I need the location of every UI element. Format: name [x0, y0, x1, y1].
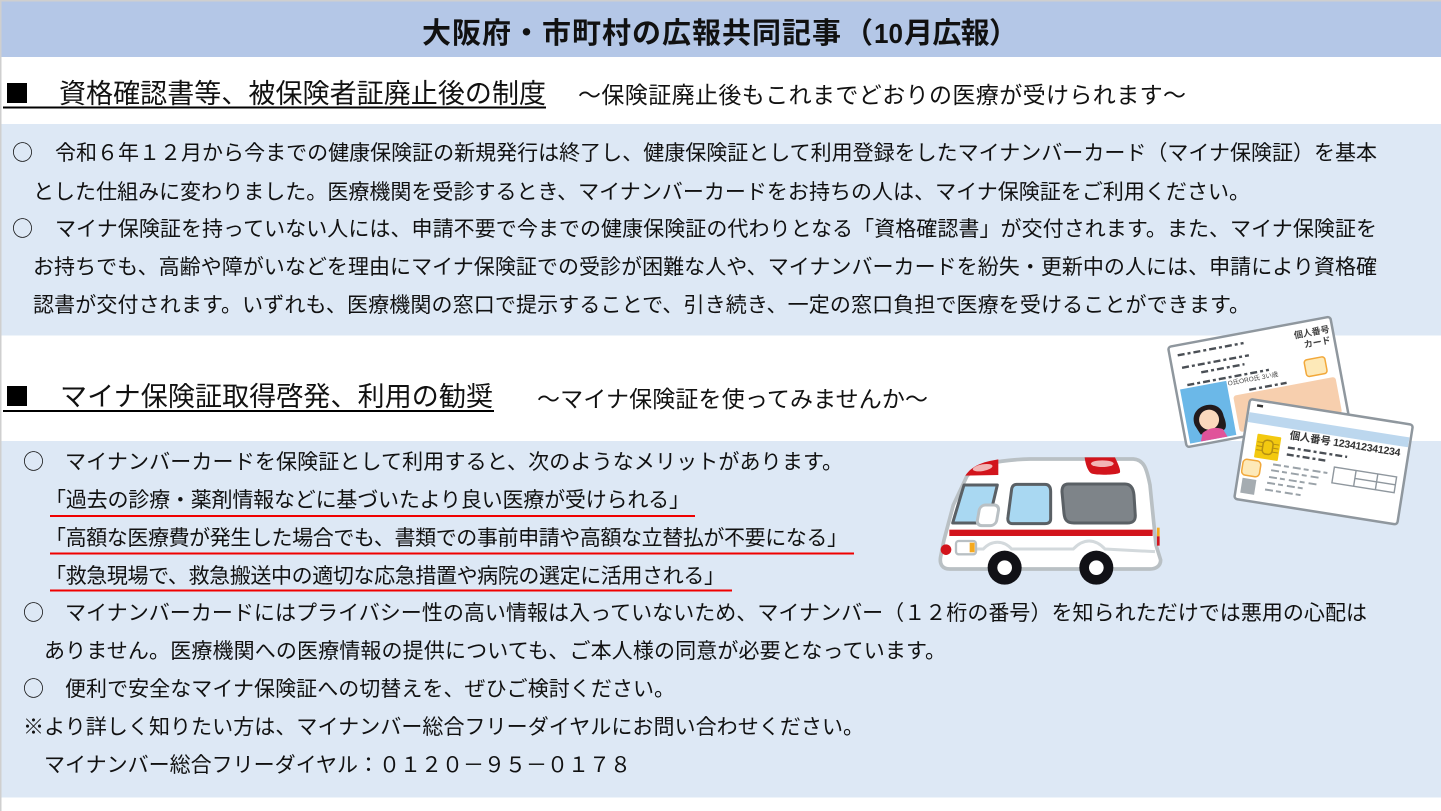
- icon: my number card front: [1168, 317, 1349, 447]
- icon: my number card front: O氏ORO氏 3い歳: [1227, 369, 1279, 388]
- icon: my number card back: 個人番号 123412341234: [1289, 429, 1402, 459]
- text: bullet 2: お持ちでも、高齢や障がいなどを理由にマイナ保険証での受診が困難な人や、マイナンバーカードを紛失・更新中の人には、申請により資格確: [33, 256, 1377, 279]
- text: bullet 1: [12, 137, 1377, 204]
- text: bullet 2: ○: [12, 213, 33, 243]
- title banner: 月広報）: [904, 17, 1018, 50]
- title banner: [2, 2, 1441, 57]
- text: free dial number: マイナンバー総合フリーダイヤル：０１２０－９５－０１７８: [44, 754, 631, 777]
- text: privacy bullet: ありません。医療機関への医療情報の提供についても、ご本人様の同意が必要となっています。: [44, 640, 946, 663]
- text: bullet 1: 令和６年１２月から今までの健康保険証の新規発行は終了し、健康保険証として利用登録をしたマイナンバーカード（マイナ保険証）を基本: [55, 142, 1377, 165]
- title banner: （: [844, 18, 873, 50]
- text: merits intro: マイナンバーカードを保険証として利用すると、次のようなメリットがあります。: [65, 451, 843, 474]
- text: merit 2 with red underline: 「高額な医療費が発生した場合でも、書類での事前申請や高額な立替払が不要になる」: [45, 527, 848, 550]
- icon: ambulance: [940, 457, 1161, 585]
- text: merit 1 with red underline: 「過去の診療・薬剤情報などに基づいたより良い医療が受けられる」: [45, 489, 690, 512]
- panel: section 1 body: [2, 124, 1441, 336]
- heading: section 2: マイナ保険証取得啓発、利用の勧奨: [60, 382, 493, 412]
- text: privacy bullet: マイナンバーカードにはプライバシー性の高い情報は入っていないため、マイナンバー（１２桁の番号）を知られただけでは悪用の心配は: [65, 602, 1367, 625]
- text: bullet 2: マイナ保険証を持っていない人には、申請不要で今までの健康保険証の代わりとなる「資格確認書」が交付されます。また、マイナ保険証を: [55, 218, 1377, 241]
- icon: my number card front: カード: [1303, 335, 1331, 350]
- panel: section 2 body: [2, 441, 1441, 798]
- text: contact note: ※より詳しく知りたい方は、マイナンバー総合フリーダイヤルにお問い合わせください。: [23, 716, 864, 739]
- subtitle: section 2: ～マイナ保険証を使ってみませんか～: [537, 386, 928, 412]
- text: recommendation bullet: ○: [23, 673, 44, 703]
- icon: my number card back: [1234, 399, 1413, 525]
- title banner: 大阪府・市町村の広報共同記事: [422, 17, 841, 50]
- text: bullet 1: ○: [12, 137, 33, 167]
- text: bullet 1: とした仕組みに変わりました。医療機関を受診するとき、マイナンバーカードをお持ちの人は、マイナ保険証をご利用ください。: [33, 181, 1250, 204]
- text: privacy bullet: ○: [23, 597, 44, 627]
- text: bullet 2: [12, 213, 1377, 317]
- heading: section 1: 資格確認書等、被保険者証廃止後の制度: [59, 79, 546, 109]
- title banner: 10: [874, 18, 903, 49]
- text: merits intro: ○: [23, 446, 44, 476]
- text: privacy bullet: [23, 597, 1367, 663]
- subtitle: section 1: ～保険証廃止後もこれまでどおりの医療が受けられます～: [578, 82, 1186, 108]
- text: bullet 2: 認書が交付されます。いずれも、医療機関の窓口で提示することで、引き続き、一定の窓口負担で医療を受けることができます。: [33, 294, 1250, 317]
- icon: my number card front: 個人番号: [1293, 323, 1330, 341]
- text: recommendation bullet: 便利で安全なマイナ保険証への切替えを、ぜひご検討ください。: [65, 678, 675, 701]
- text: merit 3 with red underline: 「救急現場で、救急搬送中の適切な応急措置や病院の選定に活用される」: [45, 565, 725, 588]
